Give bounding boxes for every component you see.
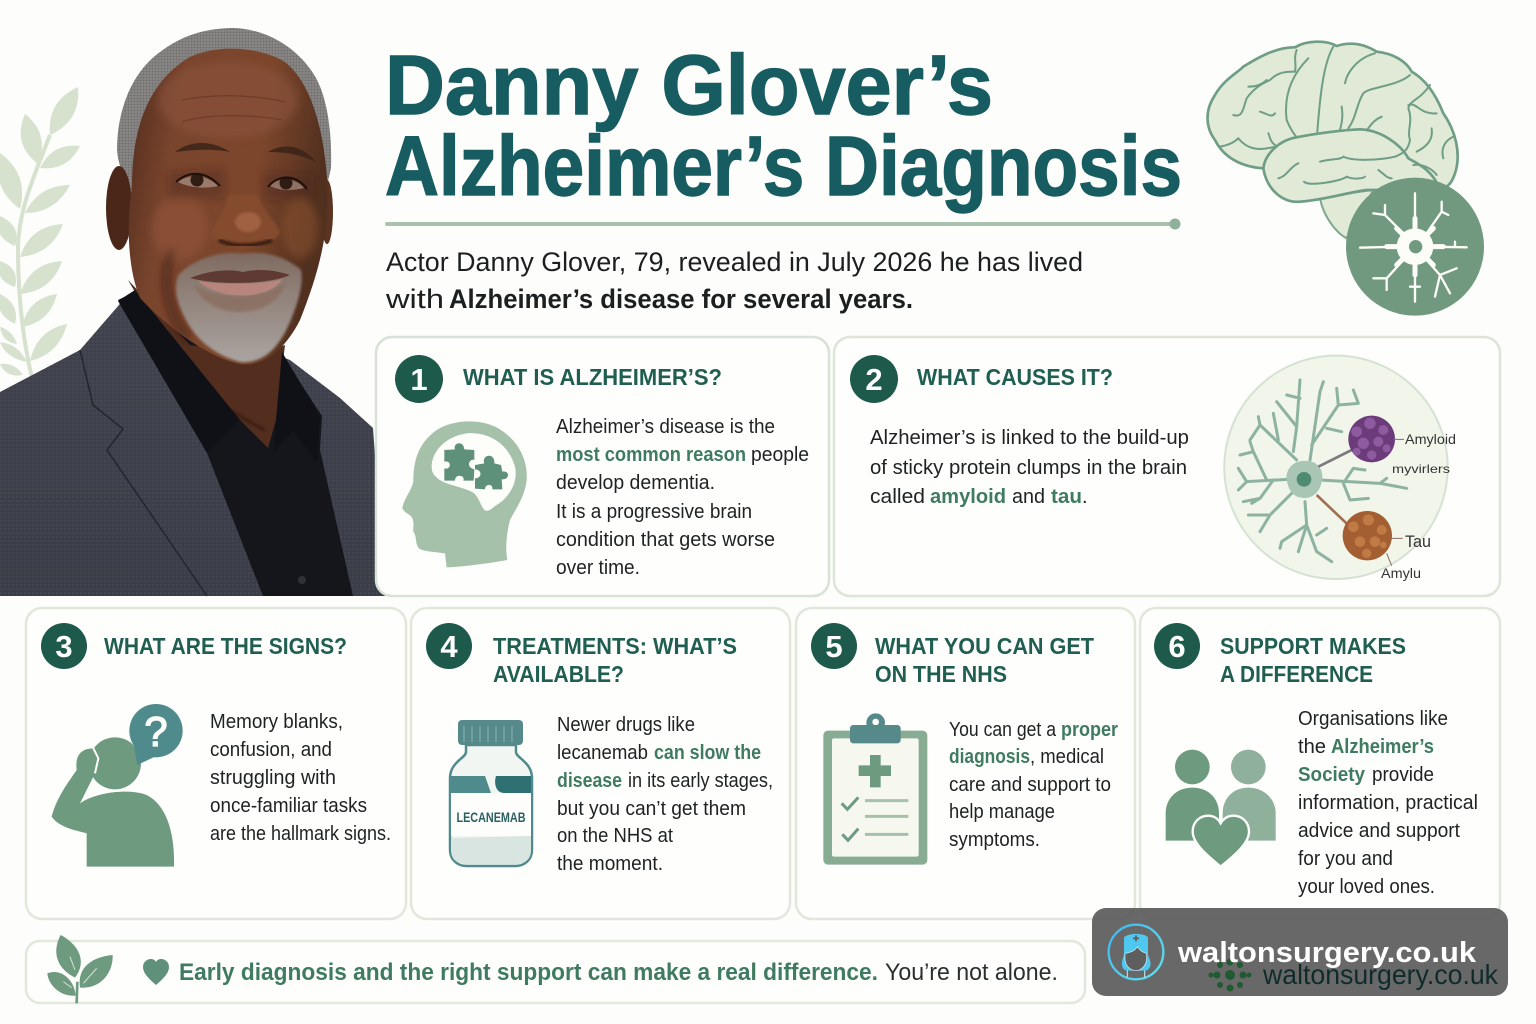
- shirt: [118, 292, 353, 596]
- panel 5 text: help manage: [949, 801, 1055, 823]
- lapel seam: [80, 350, 207, 596]
- shirt button: [298, 576, 306, 584]
- panel 6 text: your loved ones.: [1298, 876, 1435, 898]
- panel 4 text: lecanemab: [557, 742, 648, 764]
- panel 4 text: the moment.: [557, 853, 663, 875]
- title: [385, 38, 1182, 213]
- neuron circle: [1346, 178, 1484, 316]
- brows: [175, 143, 230, 152]
- panel 1: what is Alzheimer's: [376, 337, 829, 596]
- panel 6 text: advice and support: [1298, 820, 1460, 842]
- icon: lecanemab bottle: [450, 720, 532, 866]
- panel 2: what causes it: [834, 337, 1500, 596]
- panel 1 text: people: [751, 444, 809, 466]
- icon: head with puzzle: [402, 421, 527, 567]
- right eye: [270, 179, 304, 190]
- heading 5: WHAT YOU CAN GET: [875, 633, 1094, 659]
- panel 4 text: [557, 714, 773, 875]
- underlying site logo: waltonsurgery.co.uk: [1262, 959, 1499, 990]
- title: Alzheimer’s Diagnosis: [385, 119, 1182, 213]
- beard: [176, 253, 302, 362]
- shirt collar: [118, 290, 320, 462]
- neuron nucleus: [1409, 240, 1422, 253]
- number badge 5: [811, 623, 857, 669]
- panel 1 text: condition that gets worse: [556, 529, 775, 551]
- number badge 2: [850, 355, 898, 403]
- panel 4 text: can slow the: [654, 742, 761, 764]
- panel 6 text: for you and: [1298, 848, 1393, 870]
- intro text: [385, 247, 1083, 314]
- folds: [1220, 47, 1453, 184]
- title underline: [385, 218, 1180, 230]
- left eye: [178, 176, 218, 188]
- number badge 4: 4: [440, 629, 458, 664]
- panel 4 text: on the NHS at: [557, 825, 673, 847]
- panel 5: NHS: [796, 608, 1135, 919]
- panel 3 text: are the hallmark signs.: [210, 823, 391, 845]
- panel 5 text: care and support to: [949, 774, 1111, 796]
- icon: plant: [47, 935, 113, 1003]
- illustration labels: Amylu: [1381, 565, 1421, 581]
- panel 2 text: called: [870, 486, 925, 508]
- ears: [106, 166, 132, 250]
- panel 4 text: Newer drugs like: [557, 714, 695, 736]
- panel 2 text: amyloid: [930, 486, 1006, 508]
- intro text: Actor Danny Glover, 79, revealed in July 2026 he has lived: [386, 247, 1083, 277]
- panel 1 text: develop dementia.: [556, 472, 715, 494]
- panel 5 text: [949, 719, 1118, 851]
- neuron soma: [1286, 461, 1322, 498]
- heading 6: [1220, 633, 1406, 687]
- panel 2 text: of sticky protein clumps in the brain: [870, 457, 1187, 479]
- illustration labels: Amyloid: [1405, 431, 1456, 447]
- panel 6 text: Alzheimer’s: [1331, 736, 1434, 758]
- footer message: Early diagnosis and the right support can make a real difference.: [179, 959, 878, 986]
- heading 2: WHAT CAUSES IT?: [917, 364, 1113, 390]
- panel 4 text: but you can’t get them: [557, 798, 746, 820]
- panel 4 text: in its early stages,: [628, 770, 773, 792]
- temporal lobe: [1263, 129, 1440, 190]
- number badge 5: 5: [825, 629, 843, 664]
- heading 6: A DIFFERENCE: [1220, 661, 1373, 687]
- illustration labels: Tau: [1405, 532, 1431, 551]
- illustration labels: [1381, 431, 1456, 581]
- panel 6: support: [1140, 608, 1500, 919]
- panel 3 text: struggling with: [210, 767, 336, 789]
- panel 3 text: Memory blanks,: [210, 711, 343, 733]
- neck: [128, 280, 285, 448]
- heading 4: [493, 633, 737, 687]
- mouth: [190, 270, 290, 295]
- facial shading: [152, 62, 318, 338]
- number badge 3: [41, 623, 87, 669]
- number badge 1: [395, 355, 443, 403]
- panel 2 text: Alzheimer’s is linked to the build-up: [870, 427, 1189, 449]
- icon: two people with heart: [1166, 750, 1276, 867]
- watermark brand: [1109, 925, 1477, 979]
- footer message: You’re not alone.: [885, 959, 1058, 986]
- panel 3 text: [210, 711, 391, 845]
- title: Danny Glover’s: [385, 38, 993, 132]
- panel 1 text: over time.: [556, 557, 640, 579]
- panel 2 text: .: [1082, 486, 1088, 508]
- panel 3 text: confusion, and: [210, 739, 332, 761]
- panel 1 text: It is a progressive brain: [556, 501, 752, 523]
- panel 3 text: once-familiar tasks: [210, 795, 367, 817]
- panel 6 text: Society: [1298, 764, 1366, 786]
- forehead lines: [182, 96, 285, 122]
- decorative leaf branch: [0, 87, 80, 378]
- face: [129, 49, 328, 365]
- number badge 3: 3: [55, 629, 73, 664]
- icon: heart: [143, 959, 169, 985]
- skin under lip: [194, 282, 286, 312]
- icon: confused person with question bubble: [52, 704, 183, 867]
- panel 5 text: symptoms.: [949, 829, 1040, 851]
- neuron branches: [1238, 380, 1407, 562]
- intro text: Alzheimer’s disease for several years.: [449, 284, 913, 314]
- panel 2 text: and: [1012, 486, 1045, 508]
- panel 3: signs: [26, 608, 406, 919]
- panel 1 text: most common reason: [556, 444, 746, 466]
- heading 5: [875, 633, 1094, 687]
- heading 4: TREATMENTS: WHAT’S: [493, 633, 737, 659]
- panel 6 text: the: [1298, 736, 1326, 758]
- hair: [117, 28, 331, 190]
- icon: clipboard: [823, 713, 927, 865]
- panel 4 text: disease: [557, 770, 622, 792]
- heading 1: WHAT IS ALZHEIMER’S?: [463, 364, 722, 390]
- icon: confused person with question bubble: ?: [144, 708, 168, 755]
- number badge 4: [426, 623, 472, 669]
- panel 4: treatments: [411, 608, 790, 919]
- panel 6 text: Organisations like: [1298, 708, 1448, 730]
- cerebellum: [1320, 190, 1373, 238]
- panel 5 text: proper: [1061, 719, 1118, 741]
- panel 5 text: diagnosis: [949, 746, 1030, 768]
- watermark background: [1092, 908, 1508, 996]
- brain illustration with neuron: [1207, 42, 1484, 316]
- number badge 6: 6: [1168, 629, 1186, 664]
- panel 5 text: You can get a: [949, 719, 1057, 741]
- number badge 6: [1154, 623, 1200, 669]
- number badge 1: 1: [410, 362, 428, 397]
- number badge 2: 2: [865, 362, 883, 397]
- question bubble: [129, 704, 183, 757]
- heading 6: SUPPORT MAKES: [1220, 633, 1406, 659]
- heading 3: WHAT ARE THE SIGNS?: [104, 633, 347, 659]
- illustration labels: myvirlers: [1392, 462, 1450, 476]
- intro text: with: [385, 284, 444, 314]
- cerebrum: [1207, 42, 1458, 202]
- neuron with amyloid and tau illustration: [1224, 356, 1448, 579]
- tau clump: [1343, 511, 1392, 560]
- amyloid clump: [1348, 416, 1395, 462]
- panel 1 text: Alzheimer’s disease is the: [556, 416, 775, 438]
- panel 5 text: , medical: [1030, 746, 1104, 768]
- nurse logo: [1109, 925, 1163, 979]
- neuron: [1360, 193, 1467, 302]
- axons to clumps: [1318, 450, 1352, 467]
- panel 1 text: [556, 416, 809, 579]
- footer banner: [26, 935, 1085, 1003]
- label lines: [1387, 439, 1404, 566]
- panel 6 text: provide: [1372, 764, 1434, 786]
- watermark text: waltonsurgery.co.uk: [1177, 937, 1477, 969]
- icon: lecanemab bottle: LECANEMAB: [456, 809, 526, 825]
- portrait of Danny Glover: [0, 28, 385, 596]
- nose: [211, 195, 280, 247]
- panel 2 text: [870, 427, 1189, 508]
- jacket: [0, 298, 385, 596]
- heading 5: ON THE NHS: [875, 661, 1007, 687]
- panel 6 text: [1298, 708, 1478, 898]
- puzzle pieces: [444, 443, 474, 481]
- panel 6 text: information, practical: [1298, 792, 1478, 814]
- panel 2 text: tau: [1051, 486, 1082, 508]
- heading 4: AVAILABLE?: [493, 661, 624, 687]
